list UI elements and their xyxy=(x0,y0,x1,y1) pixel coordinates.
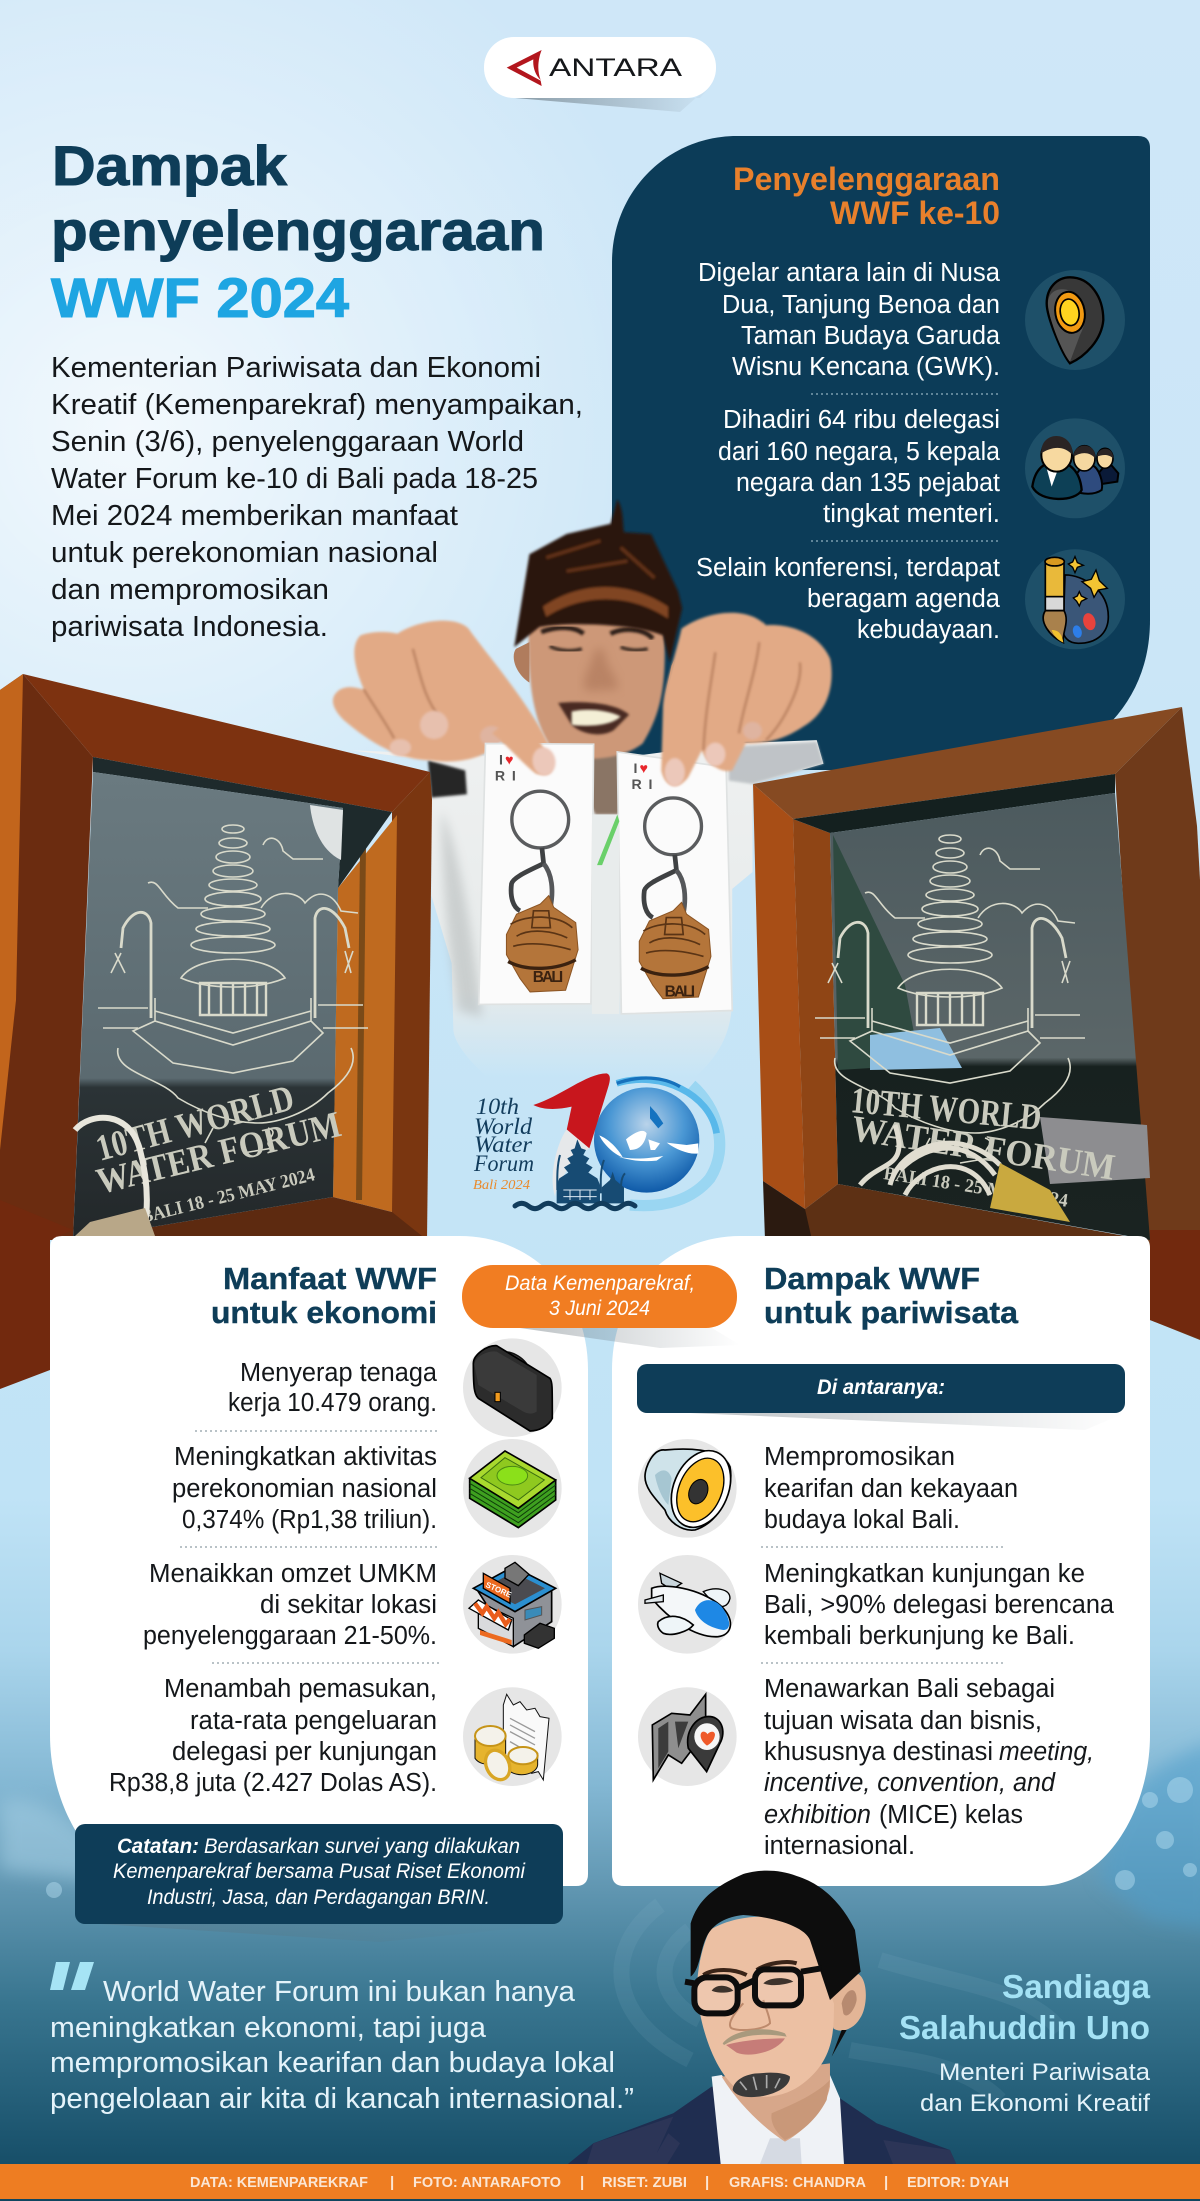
portrait: Sandiaga Uno xyxy=(567,1871,957,2165)
intro paragraph: Water Forum ke-10 di Bali pada 18-25 xyxy=(51,463,538,495)
item: tenaga kerja: kerja 10.479 orang. xyxy=(228,1389,437,1417)
text block: delegasi: Dihadiri 64 ribu delegasi xyxy=(723,406,1000,434)
photo: man holding keychains: BALI xyxy=(533,969,563,986)
intro paragraph: Kementerian Pariwisata dan Ekonomi xyxy=(51,352,541,384)
heading: Dampak WWF: Dampak WWF xyxy=(764,1261,980,1296)
item: kunjungan: kembali berkunjung ke Bali. xyxy=(764,1622,1075,1650)
WWF 10th logo: World xyxy=(474,1114,533,1139)
item: perekonomian nasional: Meningkatkan aktivitas xyxy=(174,1443,437,1471)
photo: left wooden frame with etched glass: 10TH WORLD xyxy=(92,1078,298,1170)
footer credits bar: | xyxy=(705,2174,709,2191)
footer credits bar: EDITOR: DYAH xyxy=(907,2174,1009,2191)
text block: agenda budaya: beragam agenda xyxy=(807,585,1001,613)
photo: right wooden frame with etched glass xyxy=(753,707,1200,1340)
item: tenaga kerja: Menyerap tenaga xyxy=(240,1359,438,1387)
speaker role: dan Ekonomi Kreatif xyxy=(920,2090,1150,2117)
intro paragraph: untuk perekonomian nasional xyxy=(51,537,438,569)
item: MICE: internasional. xyxy=(764,1832,915,1860)
item: pemasukan: rata-rata pengeluaran xyxy=(190,1707,437,1735)
item: kearifan budaya: Mempromosikan xyxy=(764,1443,955,1471)
intro paragraph: Senin (3/6), penyelenggaraan World xyxy=(51,426,524,458)
footer credits bar: | xyxy=(580,2174,584,2191)
brown band left xyxy=(0,1200,73,1389)
photo: man holding keychains: RI xyxy=(495,769,516,785)
item: MICE xyxy=(764,1675,1094,1860)
item: pemasukan: Rp38,8 juta (2.427 Dolas AS). xyxy=(109,1769,437,1797)
quote: meningkatkan ekonomi, tapi juga xyxy=(50,2012,487,2044)
footer credits bar: GRAFIS: CHANDRA xyxy=(729,2174,866,2191)
footer credits bar: FOTO: ANTARAFOTO xyxy=(413,2174,561,2191)
text block: delegasi: dari 160 negara, 5 kepala xyxy=(718,438,1001,466)
callout: Data Kemenparekraf: 3 Juni 2024 xyxy=(549,1297,650,1320)
panel heading: Penyelenggaraan WWF ke-10: WWF ke-10 xyxy=(830,195,1000,231)
label bar: Di antaranya xyxy=(637,1364,1125,1430)
photo: man holding keychains: BALI xyxy=(665,983,695,1000)
heading: Manfaat WWF: Manfaat WWF xyxy=(223,1261,437,1296)
speaker name: Sandiaga xyxy=(1002,1968,1151,2005)
logo: ANTARA pill xyxy=(484,37,716,112)
title: penyelenggaraan xyxy=(51,199,545,262)
note: Catatan: Kemenparekraf bersama Pusat Riset Ekonomi xyxy=(113,1860,526,1883)
title: Dampak xyxy=(52,134,288,197)
title xyxy=(51,134,545,329)
item: kunjungan xyxy=(764,1560,1115,1650)
icon: quotation mark xyxy=(50,1962,94,1990)
logo: ANTARA pill: ANTARA xyxy=(549,54,682,82)
brown band right xyxy=(1150,1230,1200,1339)
intro paragraph: Kreatif (Kemenparekraf) menyampaikan, xyxy=(51,389,583,421)
icon: delegates xyxy=(1025,418,1125,518)
intro paragraph xyxy=(51,352,583,643)
item: kunjungan: Bali, >90% delegasi berencana xyxy=(764,1591,1115,1619)
keychain right xyxy=(639,798,711,999)
item: pemasukan: Menambah pemasukan, xyxy=(164,1675,437,1703)
text block: agenda budaya xyxy=(696,554,1001,644)
item: perekonomian nasional: perekonomian nasional xyxy=(172,1475,437,1503)
photo: man holding keychains: ♥ xyxy=(640,761,648,777)
item: perekonomian nasional xyxy=(172,1443,437,1534)
text block: delegasi xyxy=(718,406,1001,528)
photo: left wooden frame with etched glass: BALI 18 - 25 MAY 2024 xyxy=(139,1164,317,1228)
photo: left wooden frame with etched glass: WATER FORUM xyxy=(92,1104,345,1203)
intro paragraph: pariwisata Indonesia. xyxy=(51,611,328,643)
speaker role xyxy=(920,2059,1150,2117)
keychain left xyxy=(506,791,578,992)
item: perekonomian nasional: 0,374% (Rp1,38 triliun). xyxy=(182,1506,437,1534)
item: omzet UMKM: Menaikkan omzet UMKM xyxy=(149,1560,437,1588)
photo: man holding keychains xyxy=(333,499,832,1078)
text block: lokasi: Wisnu Kencana (GWK). xyxy=(732,353,1000,381)
item: MICE: tujuan wisata dan bisnis, xyxy=(764,1707,1042,1735)
footer credits bar xyxy=(0,2164,1200,2199)
item: tenaga kerja xyxy=(228,1359,438,1417)
note: Catatan: Industri, Jasa, dan Perdagangan BRIN. xyxy=(147,1886,490,1909)
speaker role: Menteri Pariwisata xyxy=(939,2059,1150,2086)
photo: man holding keychains: I xyxy=(634,761,637,777)
text block: delegasi: negara dan 135 pejabat xyxy=(736,469,1000,497)
WWF 10th logo xyxy=(473,1073,720,1209)
footer credits bar: RISET: ZUBI xyxy=(602,2174,687,2191)
callout: Data Kemenparekraf xyxy=(462,1265,740,1348)
footer credits bar: | xyxy=(884,2174,888,2191)
item: MICE: incentive, convention, and xyxy=(764,1769,1056,1797)
icon: store: STORE xyxy=(484,1580,513,1600)
photo: right wooden frame with etched glass: 10TH WORLD xyxy=(849,1080,1043,1139)
WWF 10th logo: 10th xyxy=(476,1094,519,1119)
text block: lokasi: Dua, Tanjung Benoa dan xyxy=(722,291,1000,319)
photo: left wooden frame with etched glass xyxy=(0,674,432,1240)
item: omzet UMKM: di sekitar lokasi xyxy=(260,1591,437,1619)
panel: Dampak WWF untuk pariwisata xyxy=(612,1236,1150,1886)
item: MICE: exhibition xyxy=(764,1801,871,1829)
note: Catatan: Catatan: xyxy=(117,1835,199,1858)
WWF 10th logo: Water xyxy=(474,1132,533,1157)
quote: World Water Forum ini bukan hanya xyxy=(103,1976,576,2008)
speaker name: Salahuddin Uno xyxy=(899,2009,1150,2046)
item: kearifan budaya: kearifan dan kekayaan xyxy=(764,1475,1018,1503)
icon: coins and receipt xyxy=(463,1687,562,1786)
note: Catatan: Berdasarkan survei yang dilakukan xyxy=(204,1835,520,1858)
text block: lokasi: Digelar antara lain di Nusa xyxy=(698,259,1001,287)
photo: man holding keychains: ♥ xyxy=(505,752,514,768)
text block: agenda budaya: kebudayaan. xyxy=(857,616,1000,644)
heading: Manfaat WWF xyxy=(211,1261,437,1330)
note: Catatan xyxy=(75,1824,563,1942)
item: omzet UMKM xyxy=(143,1560,437,1650)
item: kearifan budaya: budaya lokal Bali. xyxy=(764,1506,960,1534)
icon: location pin xyxy=(1025,270,1125,370)
item: pemasukan xyxy=(109,1675,437,1797)
quote xyxy=(50,1976,634,2115)
heading: Dampak WWF xyxy=(764,1261,1019,1330)
label bar: Di antaranya: Di antaranya: xyxy=(817,1376,945,1399)
text block: lokasi xyxy=(698,259,1001,381)
icon: money stack xyxy=(463,1439,562,1538)
item: MICE: meeting, xyxy=(999,1738,1094,1766)
item: pemasukan: delegasi per kunjungan xyxy=(172,1738,437,1766)
heading: Manfaat WWF: untuk ekonomi xyxy=(211,1295,437,1330)
item: MICE: khususnya destinasi xyxy=(764,1738,993,1766)
item: kearifan budaya xyxy=(764,1443,1018,1534)
icon: airplane xyxy=(638,1555,737,1654)
text block: delegasi: tingkat menteri. xyxy=(823,500,1000,528)
item: MICE: (MICE) kelas xyxy=(879,1801,1023,1829)
quote: pengelolaan air kita di kancah internasional.” xyxy=(50,2083,634,2115)
photo: right wooden frame with etched glass: BALI 18 - 25 MAY 2024 xyxy=(882,1163,1070,1212)
title: WWF 2024 xyxy=(51,266,349,329)
panel heading: Penyelenggaraan WWF ke-10 xyxy=(733,161,1000,231)
panel: Manfaat WWF untuk ekonomi xyxy=(50,1236,588,1886)
text block: agenda budaya: Selain konferensi, terdapat xyxy=(696,554,1000,582)
icon: speaker xyxy=(638,1439,742,1538)
footer credits bar: DATA: KEMENPAREKRAF xyxy=(190,2174,368,2191)
icon: store xyxy=(463,1555,562,1654)
WWF 10th logo: Bali 2024 xyxy=(473,1178,530,1193)
item: MICE: Menawarkan Bali sebagai xyxy=(764,1675,1055,1703)
panel heading: Penyelenggaraan WWF ke-10: Penyelenggaraan xyxy=(733,161,1000,197)
text block: lokasi: Taman Budaya Garuda xyxy=(741,322,1001,350)
photo: man holding keychains: RI xyxy=(631,777,652,793)
intro paragraph: Mei 2024 memberikan manfaat xyxy=(51,500,458,532)
photo: right wooden frame with etched glass: WATER FORUM xyxy=(849,1108,1118,1189)
intro paragraph: dan mempromosikan xyxy=(51,574,329,606)
icon: brush and palette xyxy=(1025,549,1125,649)
speaker name xyxy=(899,1968,1151,2046)
item: kunjungan: Meningkatkan kunjungan ke xyxy=(764,1560,1085,1588)
photo: man holding keychains: I xyxy=(499,752,503,768)
panel: Penyelenggaraan WWF ke-10 (background) xyxy=(612,136,1150,770)
quote: mempromosikan kearifan dan budaya lokal xyxy=(50,2047,615,2079)
callout: Data Kemenparekraf: Data Kemenparekraf, xyxy=(505,1272,695,1295)
footer credits bar: | xyxy=(390,2174,394,2191)
WWF 10th logo: Forum xyxy=(473,1151,534,1176)
heading: Dampak WWF: untuk pariwisata xyxy=(764,1295,1019,1330)
item: omzet UMKM: penyelenggaraan 21-50%. xyxy=(143,1622,437,1650)
icon: map with pin xyxy=(638,1687,737,1786)
icon: briefcase xyxy=(463,1338,562,1437)
